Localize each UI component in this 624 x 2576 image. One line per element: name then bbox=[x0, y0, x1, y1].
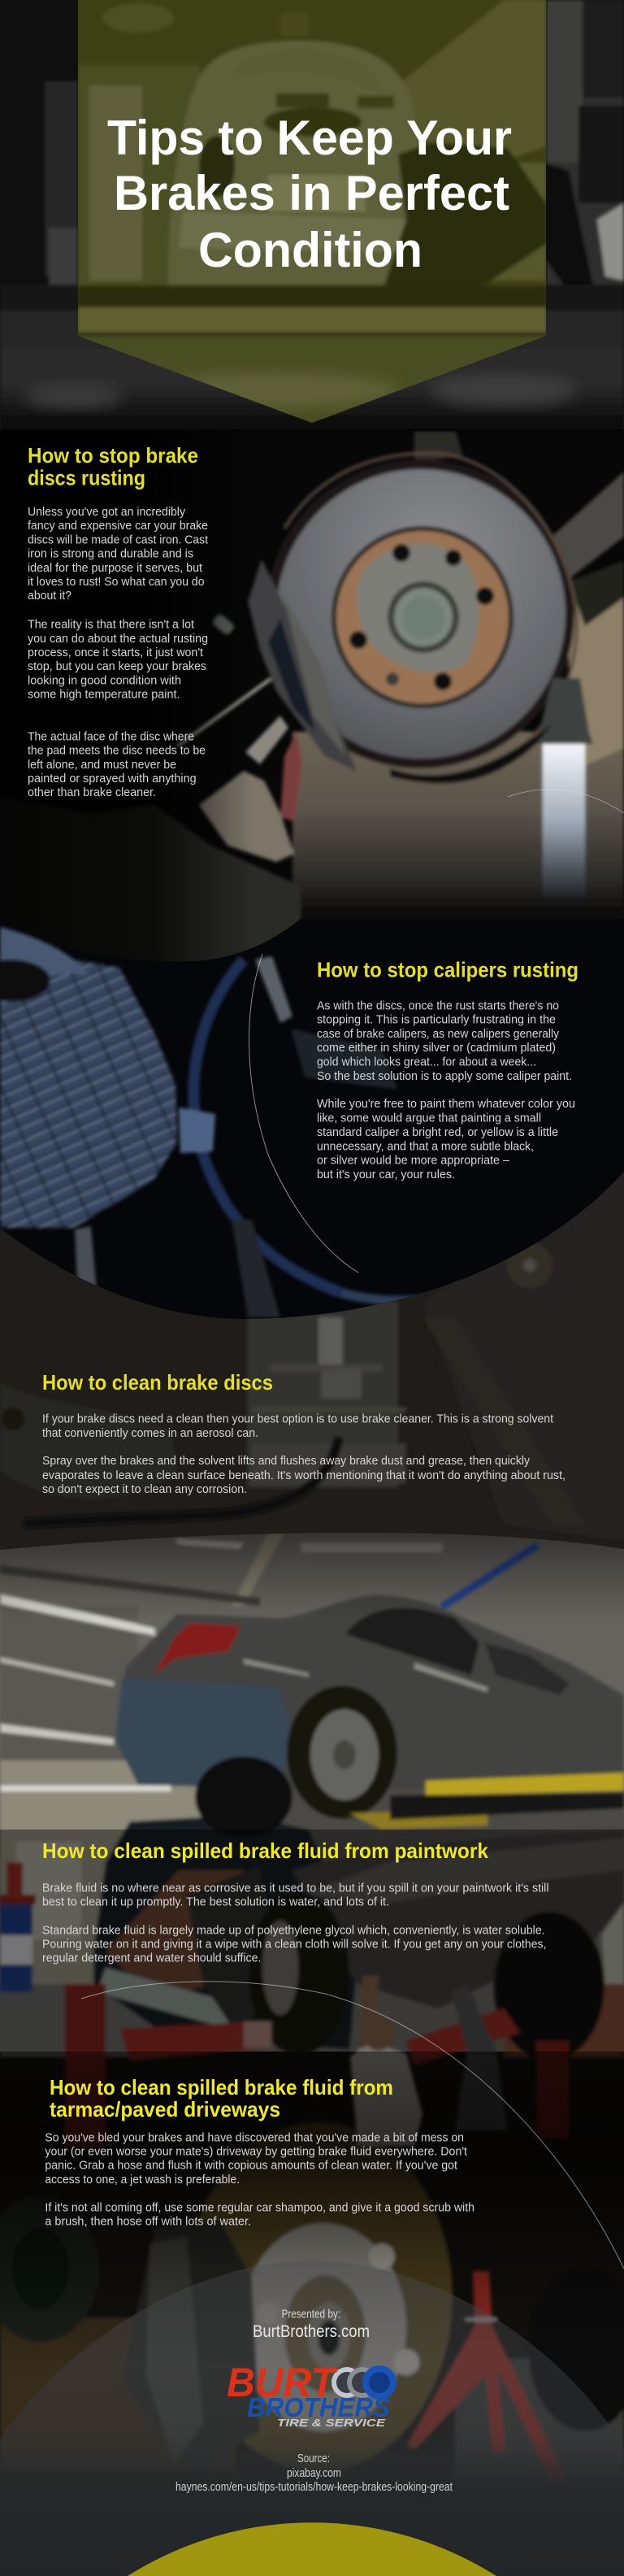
body copy: Brake fluid is no where near as corrosive as it used to be, but if you spill it on your paintwork it's still bbox=[42, 1882, 549, 1895]
panel: under-car photo behind clean brake discs bbox=[0, 1155, 624, 1550]
source credits: haynes.com/en-us/tips-tutorials/how-keep-brakes-looking-great bbox=[176, 2481, 453, 2494]
logo: Burt Brothers Tire & Service: BURT bbox=[227, 2360, 338, 2405]
source credits: Source: bbox=[297, 2452, 330, 2465]
logo: Burt Brothers Tire & Service bbox=[227, 2360, 396, 2429]
rusty hub ring bbox=[332, 526, 514, 708]
body copy: left alone, and must never be bbox=[28, 758, 176, 772]
body copy: but it's your car, your rules. bbox=[317, 1168, 455, 1181]
section text: how to clean spilled brake fluid from tarmac bbox=[45, 2075, 474, 2229]
body copy: so don't expect it to clean any corrosion. bbox=[42, 1482, 247, 1496]
heading: How to clean spilled brake fluid from bbox=[50, 2075, 393, 2100]
body copy: panic. Grab a hose and flush it with copious amounts of clean water. If you've got bbox=[45, 2159, 458, 2173]
body copy: unnecessary, and that a more subtle black, bbox=[317, 1139, 534, 1153]
body copy: fancy and expensive car your brake bbox=[28, 519, 208, 533]
body copy: that conveniently comes in an aerosol can. bbox=[42, 1426, 258, 1440]
panel: header photo bbox=[0, 0, 624, 431]
panel: dome overlay behind credits bbox=[0, 2261, 624, 2576]
title: Tips to Keep Your bbox=[107, 111, 512, 165]
tyres of second car bbox=[249, 1892, 349, 2055]
heading bbox=[50, 2075, 393, 2121]
thin circle arc line bbox=[81, 1982, 624, 2269]
body copy: or silver would be more appropriate – bbox=[317, 1153, 510, 1167]
dark gradient at garage top bbox=[0, 1530, 624, 1619]
yellow circle at the foot of the page bbox=[128, 2522, 496, 2576]
body copy: you can do about the actual rusting bbox=[28, 632, 208, 646]
body copy: If it's not all coming off, use some regular car shampoo, and give it a good scrub with bbox=[45, 2200, 474, 2214]
heading bbox=[28, 443, 198, 490]
body copy: ideal for the purpose it serves, but bbox=[28, 561, 203, 575]
body copy: While you're free to paint them whatever color you bbox=[317, 1097, 575, 1111]
tyre bbox=[0, 935, 177, 1228]
body copy: Pouring water on it and giving it a wipe with a clean cloth will solve it. If you get any on your clothes, bbox=[42, 1938, 546, 1952]
floor bands bbox=[78, 286, 546, 307]
body copy: gold which looks great... for about a week... bbox=[317, 1055, 536, 1069]
body copy: So you've bled your brakes and have discovered that you've made a bit of mess on bbox=[45, 2130, 464, 2144]
section text: how to stop brake discs rusting bbox=[28, 443, 209, 799]
lower wall behind second car bbox=[0, 1760, 244, 2033]
body copy bbox=[28, 505, 209, 799]
body copy: standard caliper a bright red, or yellow is a little bbox=[317, 1125, 558, 1139]
mechanic legs bbox=[382, 142, 546, 293]
body copy: Standard brake fluid is largely made up of polyethylene glycol which, conveniently, is water soluble. bbox=[42, 1923, 545, 1937]
body copy: stopping it. This is particularly frustrating in the bbox=[317, 1013, 556, 1027]
thin arc line bbox=[249, 954, 358, 1273]
first car body bbox=[115, 1595, 624, 1789]
ceiling light bands bbox=[0, 1533, 443, 1760]
body copy bbox=[45, 2130, 474, 2229]
blue lift beam bbox=[442, 1545, 538, 1607]
presented by credit: BurtBrothers.com bbox=[253, 2322, 370, 2341]
banner: olive ribbon with car photo bbox=[78, 0, 546, 431]
wheel spokes bbox=[255, 956, 292, 1023]
body copy: Spray over the brakes and the solvent lifts and flushes away brake dust and grease, then quickly bbox=[42, 1454, 530, 1468]
panel: garage photo with lifted cars bbox=[0, 1530, 624, 2147]
body copy: case of brake calipers, as new calipers generally bbox=[317, 1027, 559, 1041]
sleeve and hands bbox=[0, 797, 301, 968]
thin arc highlight bbox=[508, 790, 624, 813]
presented by credit bbox=[253, 2308, 370, 2341]
caliper bbox=[248, 559, 358, 772]
title: Brakes in Perfect bbox=[114, 166, 509, 220]
lower black edge bbox=[390, 724, 552, 784]
body copy: about it? bbox=[28, 589, 72, 603]
body copy: a brush, then hose off with lots of water. bbox=[45, 2215, 251, 2229]
car silhouette bbox=[168, 41, 422, 285]
screwdriver bbox=[177, 679, 271, 746]
title: Condition bbox=[198, 223, 422, 277]
red lift arm and posts bbox=[65, 1984, 569, 2147]
hub centre bbox=[357, 544, 479, 672]
dark veil over left of disc panel bbox=[0, 429, 252, 966]
icon: three wheels bbox=[332, 2365, 396, 2400]
body copy: Unless you've got an incredibly bbox=[28, 505, 185, 519]
body copy: painted or sprayed with anything bbox=[28, 772, 197, 785]
body copy: the pad meets the disc needs to be bbox=[28, 744, 206, 758]
body copy bbox=[317, 999, 575, 1181]
section text: how to stop calipers rusting bbox=[317, 957, 578, 1181]
pliers bbox=[245, 716, 302, 821]
presented by credit: Presented by: bbox=[281, 2308, 340, 2321]
body copy: other than brake cleaner. bbox=[28, 785, 156, 799]
disc face bbox=[276, 469, 566, 759]
body copy: evaporates to leave a clean surface beneath. It's worth mentioning that it won't do anything about rust, bbox=[42, 1469, 566, 1482]
body copy: If your brake discs need a clean then your best option is to use brake cleaner. This is a strong solvent bbox=[42, 1412, 554, 1426]
body copy: like, some would argue that painting a small bbox=[317, 1112, 541, 1125]
logo: Burt Brothers Tire & Service: TIRE & SERVICE bbox=[277, 2417, 385, 2429]
body copy: As with the discs, once the rust starts there's no bbox=[317, 999, 559, 1012]
underbody of second car bbox=[292, 1830, 624, 2008]
rim arc bbox=[193, 959, 341, 1293]
body copy: come either in shiny silver or (cadmium plated) bbox=[317, 1041, 556, 1055]
yellow lift rail bbox=[349, 1773, 624, 1830]
backing plate bbox=[266, 459, 574, 768]
heading: How to clean brake discs bbox=[42, 1370, 273, 1395]
dark suspension arm bbox=[552, 472, 624, 579]
body copy: The actual face of the disc where bbox=[28, 729, 194, 743]
section text: how to clean brake discs bbox=[42, 1370, 566, 1496]
panel: tarmac section dark overlay bbox=[0, 2052, 624, 2576]
heading: tarmac/paved driveways bbox=[50, 2097, 280, 2121]
source credits: pixabay.com bbox=[287, 2467, 341, 2480]
darkening veil over garage photo bbox=[0, 1830, 624, 2052]
body copy: best to clean it up promptly. The best solution is water, and lots of it. bbox=[42, 1895, 389, 1908]
body copy: discs will be made of cast iron. Cast bbox=[28, 533, 209, 546]
body copy: regular detergent and water should suffice. bbox=[42, 1951, 262, 1965]
body copy: The reality is that there isn't a lot bbox=[28, 618, 195, 632]
body copy: iron is strong and durable and is bbox=[28, 547, 193, 561]
body copy bbox=[42, 1882, 549, 1965]
mechanics bbox=[350, 1976, 508, 2147]
body copy: some high temperature paint. bbox=[28, 688, 180, 702]
logo: Burt Brothers Tire & Service: BROTHERS bbox=[247, 2392, 390, 2422]
heading: How to clean spilled brake fluid from paintwork bbox=[42, 1838, 488, 1863]
body copy: it loves to rust! So what can you do bbox=[28, 575, 205, 589]
first car wheel bbox=[195, 1686, 397, 1838]
source credits bbox=[176, 2452, 453, 2494]
blue barrel bbox=[0, 1895, 36, 1992]
body copy: access to one, a jet wash is preferable. bbox=[45, 2173, 240, 2187]
body copy: your (or even worse your mate's) driveway by getting brake fluid everywhere. Don't bbox=[45, 2144, 468, 2158]
title bbox=[107, 111, 512, 277]
heading: discs rusting bbox=[28, 465, 145, 490]
body copy: looking in good condition with bbox=[28, 673, 181, 688]
heading: How to stop brake bbox=[28, 443, 198, 468]
body copy: stop, but you can keep your brakes bbox=[28, 659, 206, 673]
section text: how to clean spilled brake fluid from paintwork bbox=[42, 1838, 549, 1965]
panel: brake disc photo bbox=[0, 429, 624, 968]
wall behind the disc bbox=[292, 732, 624, 919]
panel: tyre and wheel photo bbox=[0, 894, 624, 1334]
body copy: So the best solution is to apply some caliper paint. bbox=[317, 1069, 572, 1083]
flashlight bbox=[534, 678, 593, 899]
bolt holes bbox=[349, 544, 494, 690]
body copy: process, once it starts, it just won't bbox=[28, 646, 204, 659]
panel: footer photo of rotor and jack stand bbox=[0, 2033, 624, 2576]
body copy bbox=[42, 1412, 566, 1496]
second car and brick wall bbox=[93, 1815, 358, 2049]
heading: How to stop calipers rusting bbox=[317, 957, 578, 981]
